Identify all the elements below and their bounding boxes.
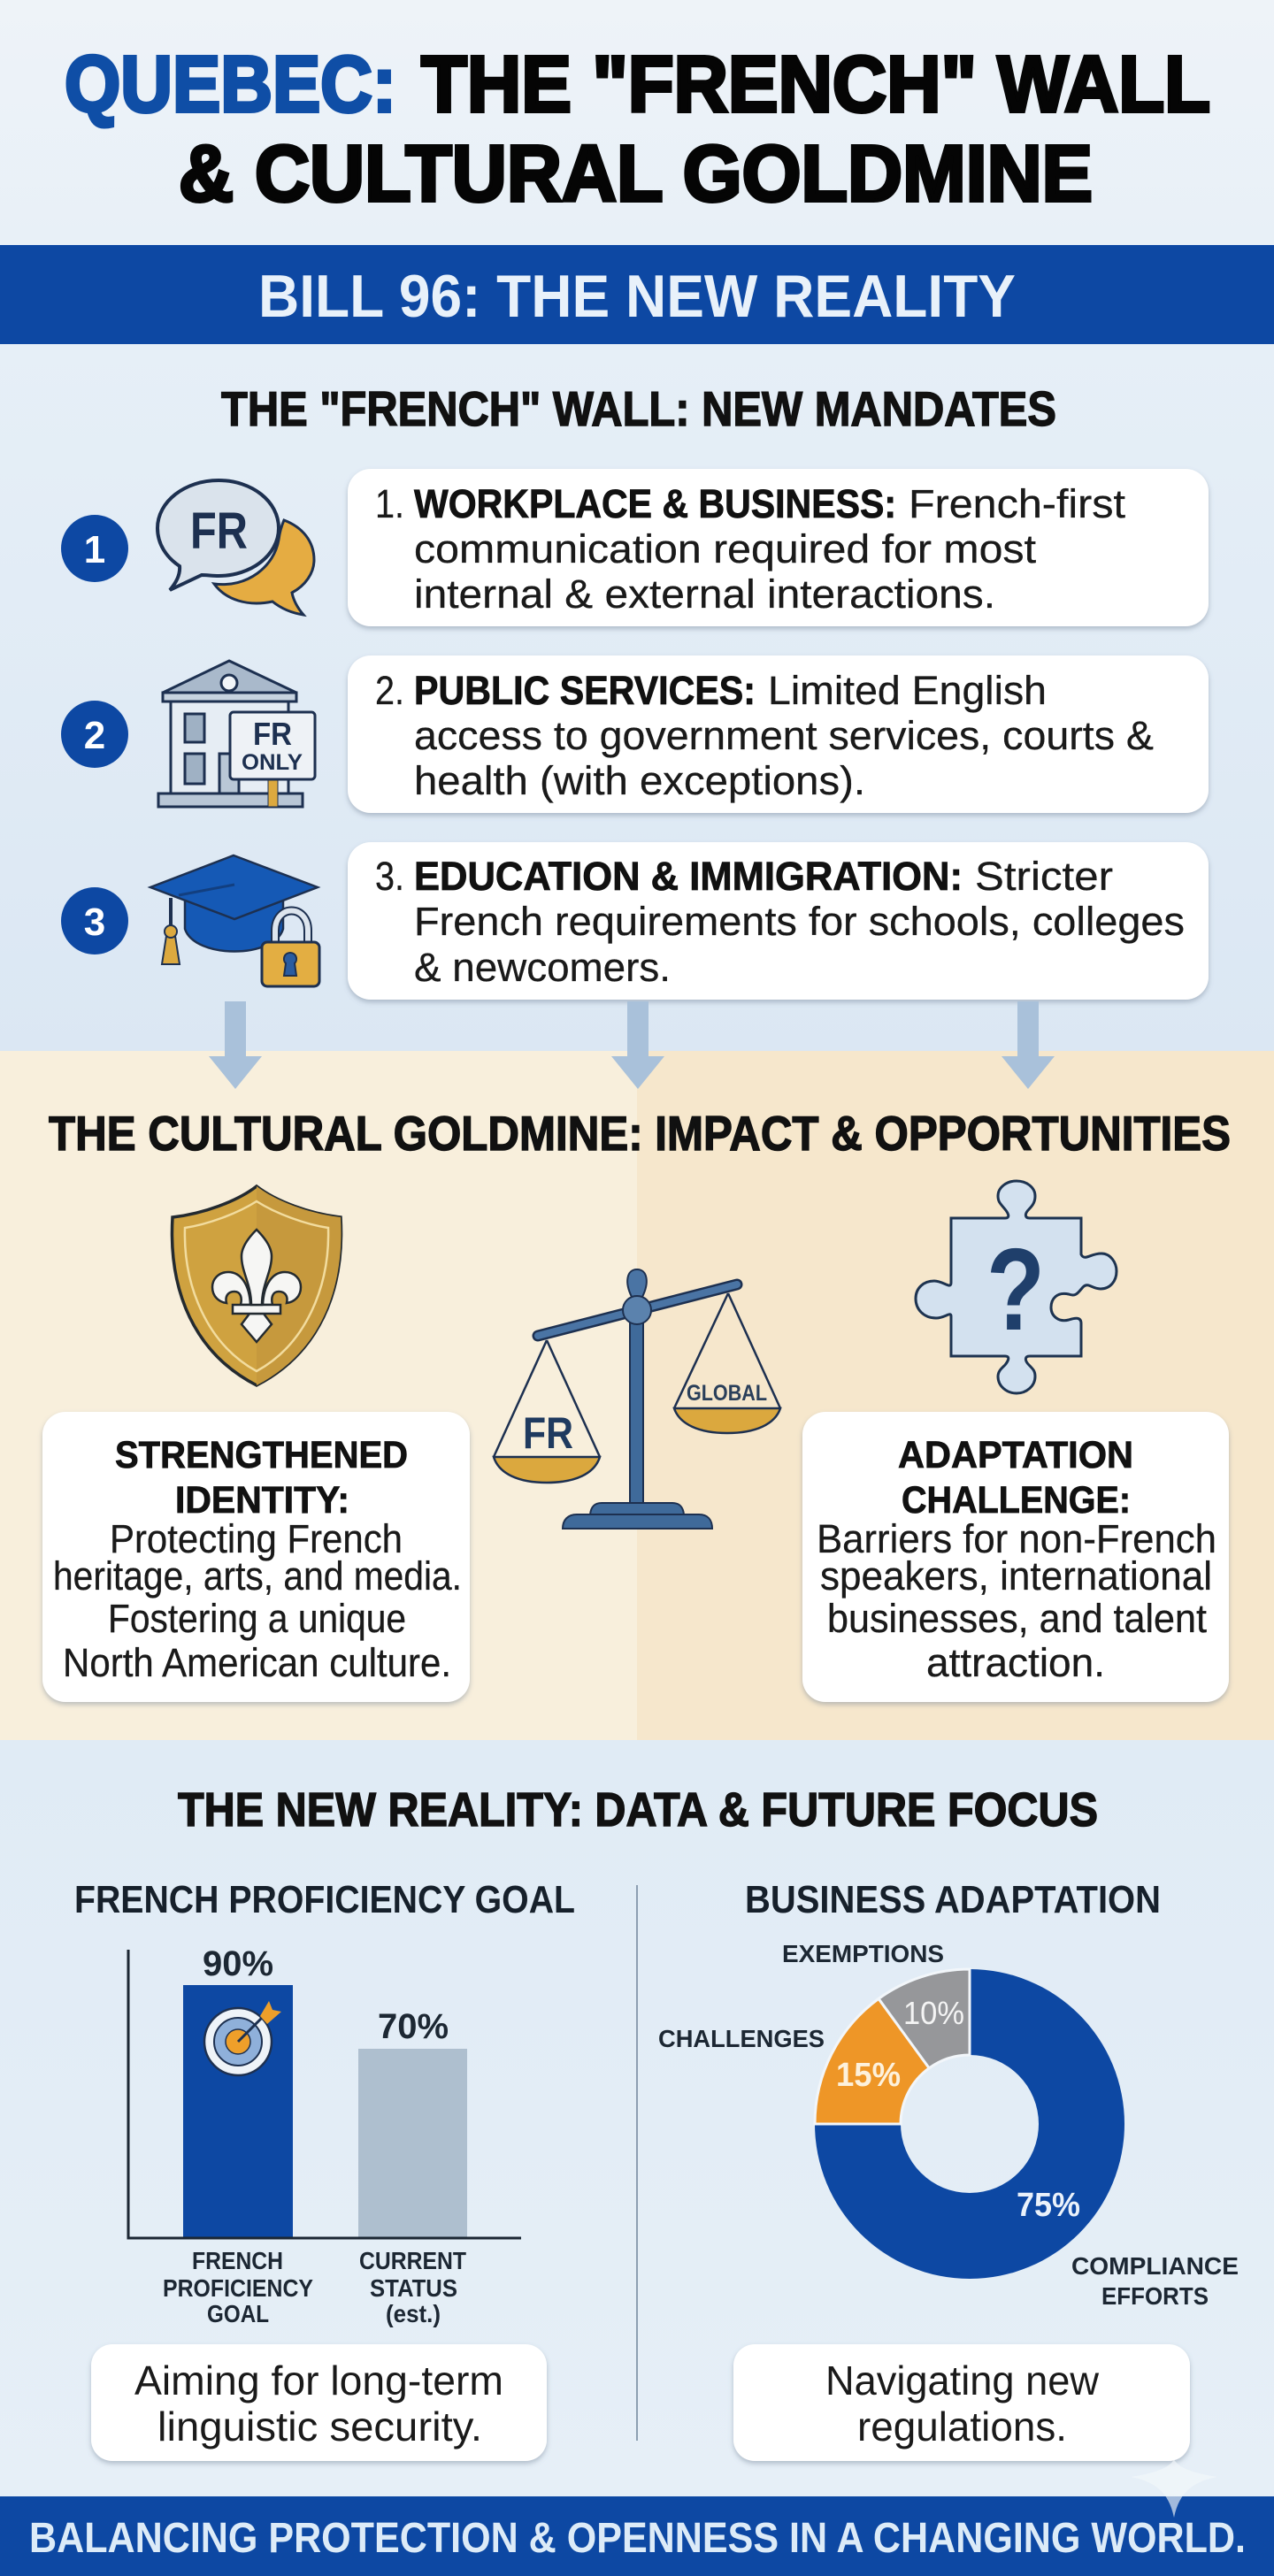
- icon: puzzle piece with question mark: [916, 1181, 1117, 1393]
- card heading: [115, 1434, 408, 1522]
- icon: government building with FR only sign: ONLY: [242, 750, 303, 775]
- card: education & immigration: & newcomers.: [414, 945, 671, 990]
- card: workplace & business: communication required for most: [414, 526, 1037, 571]
- bar chart: (est.): [386, 2300, 441, 2327]
- title: THE "FRENCH" WALL: [421, 41, 1210, 129]
- card: workplace & business: [348, 469, 1209, 626]
- card: workplace & business: internal & external interactions.: [414, 571, 995, 617]
- donut chart: 75%: [1017, 2187, 1080, 2224]
- heading: new mandates: THE "FRENCH" WALL: NEW MANDATES: [221, 381, 1056, 436]
- banner: Bill 96: [0, 245, 1274, 344]
- heading: data & future focus: THE NEW REALITY: DATA & FUTURE FOCUS: [178, 1783, 1098, 1836]
- card body: Barriers for non-French: [817, 1516, 1216, 1561]
- panel: French proficiency goal: [74, 1878, 575, 2461]
- card: education & immigration: [348, 842, 1209, 1000]
- number badge 1: [61, 515, 128, 582]
- bar chart: PROFICIENCY: [163, 2274, 313, 2302]
- title: & CULTURAL GOLDMINE: [179, 130, 1093, 218]
- bar chart: FRENCH: [192, 2247, 283, 2274]
- card heading: IDENTITY:: [175, 1479, 349, 1522]
- number badge 1: 1: [84, 528, 105, 571]
- card body: North American culture.: [63, 1640, 451, 1685]
- icon: balance scale: GLOBAL: [687, 1381, 767, 1406]
- number badge 2: 2: [84, 714, 105, 757]
- card: education & immigration: French requirements for schools, colleges: [414, 899, 1185, 944]
- card body: attraction.: [926, 1640, 1105, 1685]
- donut chart: 15%: [836, 2057, 901, 2094]
- icon: shield with fleur-de-lis: [172, 1186, 342, 1385]
- icon: graduation cap with padlock: [150, 855, 319, 986]
- icon: speech bubbles: FR: [190, 502, 248, 560]
- chart title: FRENCH PROFICIENCY GOAL: [74, 1878, 575, 1921]
- card: public services: 2.: [375, 668, 404, 713]
- card heading: ADAPTATION: [898, 1434, 1133, 1476]
- bar chart: CURRENT: [359, 2247, 466, 2274]
- card: workplace & business: 1.: [375, 481, 404, 526]
- bar chart: 90%: [203, 1944, 273, 1983]
- bar chart: 70%: [378, 2007, 449, 2046]
- title: QUEBEC:: [65, 41, 396, 129]
- donut labels: CHALLENGES: [658, 2025, 825, 2052]
- card: adaptation challenge: [802, 1412, 1229, 1702]
- panel: cultural goldmine background: [0, 1051, 1274, 1740]
- card: education & immigration: Stricter: [975, 854, 1113, 899]
- donut labels: [658, 1940, 1239, 2310]
- card: workplace & business: WORKPLACE & BUSINESS:: [414, 481, 896, 526]
- number badge 3: 3: [84, 901, 105, 944]
- card: education & immigration: EDUCATION & IMMIGRATION:: [414, 854, 963, 899]
- bar chart: [128, 1944, 521, 2327]
- banner: Bill 96: BILL 96: THE NEW REALITY: [258, 263, 1016, 330]
- divider: [636, 1885, 638, 2441]
- card: strengthened identity: [42, 1412, 470, 1702]
- caption: Aiming for long-term: [134, 2358, 503, 2404]
- card body: heritage, arts, and media.: [53, 1553, 462, 1598]
- card body: [817, 1516, 1216, 1685]
- donut labels: EXEMPTIONS: [782, 1940, 944, 1967]
- card: public services: PUBLIC SERVICES:: [414, 668, 756, 713]
- icon: speech bubbles: [157, 480, 314, 615]
- panel: business adaptation: [658, 1878, 1239, 2461]
- title: [65, 41, 1210, 218]
- donut chart: [815, 1969, 1124, 2279]
- bar chart: GOAL: [207, 2300, 269, 2327]
- panel: mandate 1: [61, 469, 1209, 626]
- caption: Navigating new: [825, 2358, 1100, 2404]
- caption: linguistic security.: [157, 2404, 482, 2450]
- icon: government building with FR only sign: FR: [253, 716, 292, 752]
- donut labels: EFFORTS: [1101, 2282, 1209, 2310]
- card body: businesses, and talent: [827, 1596, 1207, 1641]
- panel: mandate 3: [61, 842, 1209, 1000]
- donut chart: 10%: [903, 1995, 964, 2031]
- card: workplace & business: French-first: [909, 481, 1126, 526]
- card heading: CHALLENGE:: [902, 1479, 1131, 1522]
- arrows: mandates to goldmine: [209, 1001, 1055, 1089]
- icon: government building with FR only sign: [158, 661, 315, 807]
- caption: regulations.: [857, 2404, 1067, 2450]
- icon: target with arrow: [204, 2001, 281, 2075]
- caption: [91, 2344, 547, 2461]
- icon: balance scale: [494, 1269, 780, 1529]
- caption: [733, 2344, 1190, 2461]
- chart title: BUSINESS ADAPTATION: [745, 1878, 1161, 1921]
- card heading: [898, 1434, 1133, 1522]
- card: education & immigration: 3.: [375, 854, 404, 899]
- bar chart: STATUS: [370, 2274, 457, 2302]
- donut labels: COMPLIANCE: [1071, 2252, 1239, 2280]
- card: public services: [348, 656, 1209, 813]
- card body: Protecting French: [110, 1516, 403, 1561]
- card: public services: access to government services, courts &: [414, 713, 1154, 758]
- card body: Fostering a unique: [108, 1596, 406, 1641]
- card: public services: Limited English: [768, 668, 1047, 713]
- number badge 3: [61, 887, 128, 954]
- icon: sparkle: [1131, 2459, 1217, 2518]
- icon: balance scale: FR: [523, 1408, 573, 1458]
- icon: puzzle piece with question mark: ?: [986, 1224, 1045, 1354]
- card body: [53, 1516, 462, 1685]
- card heading: STRENGTHENED: [115, 1434, 408, 1476]
- number badge 2: [61, 701, 128, 768]
- card body: speakers, international: [820, 1553, 1212, 1598]
- footer banner: [0, 2496, 1274, 2576]
- card: public services: health (with exceptions).: [414, 758, 865, 803]
- panel: mandate 2: [61, 656, 1209, 813]
